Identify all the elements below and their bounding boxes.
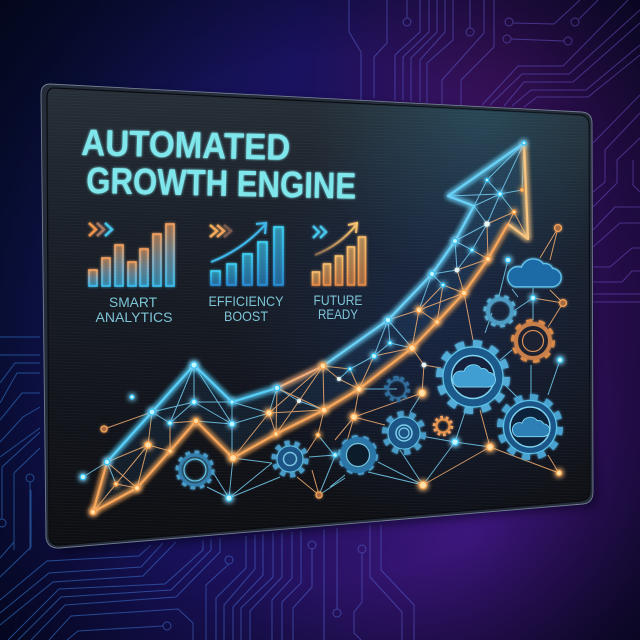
arrow lower edge (93, 224, 508, 512)
gear: ring blue (341, 438, 375, 472)
arrow body tint (93, 143, 528, 512)
label (96, 294, 172, 325)
icon: cloud (453, 365, 496, 387)
gear: concentric middle (385, 414, 423, 452)
gear: upper blue (486, 297, 514, 325)
gear: large cloud (440, 344, 506, 410)
gear: lower right cloud (501, 398, 559, 456)
title line 2: GROWTH ENGINE (86, 160, 357, 207)
gear: small orange (434, 418, 452, 434)
nodes: white (297, 221, 490, 403)
metric: smart analytics (89, 223, 174, 325)
icon: cloud (512, 417, 550, 437)
arrow right wing (508, 143, 528, 239)
icon: cloud top (508, 259, 561, 287)
icon: chevrons (313, 226, 326, 238)
title line 1: AUTOMATED (81, 122, 291, 168)
network nodes (80, 141, 566, 515)
label: BOOST (224, 308, 268, 324)
label: EFFICIENCY (208, 293, 284, 309)
bar chart (89, 224, 174, 286)
gear: left ring (178, 453, 212, 487)
label: SMART (109, 294, 157, 310)
nodes: orange (90, 188, 562, 515)
icon: chevrons (89, 223, 112, 236)
gear: orange (514, 322, 552, 360)
arrow (211, 223, 266, 262)
bar chart (211, 227, 283, 285)
icon: chevrons (210, 225, 231, 237)
nodes: cyan (80, 141, 563, 501)
label: FUTURE (314, 292, 362, 308)
network connector lines (83, 143, 563, 512)
panel: main screen (41, 84, 596, 553)
label: READY (318, 306, 359, 322)
arrow: growth line (93, 143, 528, 512)
arrow (315, 223, 357, 255)
label: ANALYTICS (96, 309, 172, 325)
label (208, 293, 284, 324)
arrow upper edge (107, 365, 277, 462)
gear: concentric small (274, 443, 306, 475)
gear: faint (386, 378, 408, 400)
metric: efficiency boost (208, 223, 284, 324)
icon: gears (178, 259, 561, 487)
label (314, 292, 362, 322)
metric: future ready (312, 223, 366, 322)
title (81, 122, 357, 207)
nodes: orange rings (101, 225, 566, 498)
bar chart (312, 237, 366, 285)
